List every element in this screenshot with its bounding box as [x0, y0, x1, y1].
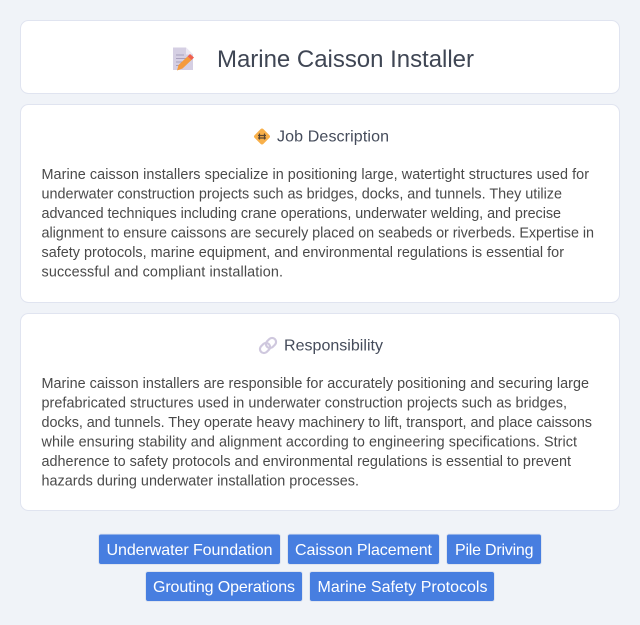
tag: Caisson Placement: Caisson Placement — [295, 542, 433, 559]
panel: job description — [20, 104, 620, 302]
icon: construction sign — [253, 128, 271, 145]
text block: responsibility: prefabricated structures used in underwater construction projects such as bridges, — [42, 395, 567, 411]
heading: job description: Job Description — [277, 128, 389, 146]
text block: responsibility: hazards during underwater installation processes. — [42, 473, 359, 489]
text block: job description: underwater construction projects such as bridges, docks, and tunnels. They utilize — [42, 186, 562, 202]
icon: document with pencil — [173, 48, 194, 70]
panel: title — [20, 20, 620, 94]
panel: responsibility — [20, 314, 620, 510]
tag: Grouting Operations — [146, 572, 302, 602]
tag: Marine Safety Protocols — [310, 572, 494, 602]
text block: responsibility: adherence to safety protocols and environmental regulations is essential to prevent — [42, 454, 571, 470]
tag: Grouting Operations: Grouting Operations — [153, 579, 295, 596]
tag: Caisson Placement — [288, 534, 440, 564]
tag: Pile Driving — [446, 534, 542, 564]
text block: job description — [42, 167, 594, 280]
tag: Pile Driving: Pile Driving — [455, 542, 534, 559]
heading: title: Marine Caisson Installer — [217, 46, 474, 73]
text block: job description: safety protocols, marine equipment, and environmental regulations is essential for — [42, 245, 564, 261]
text block: responsibility: while ensuring stability and alignment according to engineering specifications. Strict — [40, 434, 577, 450]
tag row: skills — [98, 534, 542, 602]
text block: job description: Marine caisson installers specialize in positioning large, watertight structures used for — [42, 167, 589, 183]
icon: chain link — [258, 336, 278, 355]
text block: job description: alignment to ensure caissons are securely placed on seabeds or riverbeds. Expertise in — [42, 225, 594, 241]
heading: responsibility: Responsibility — [284, 338, 383, 354]
tag: Underwater Foundation: Underwater Foundation — [106, 542, 272, 559]
text block: responsibility: Marine caisson installers are responsible for accurately positioning and securing large — [42, 376, 589, 392]
text block: responsibility: docks, and tunnels. They operate heavy machinery to lift, transport, and place caissons — [42, 415, 592, 431]
text block: job description: advanced techniques including crane operations, underwater welding, and precise — [42, 206, 561, 222]
tag: Marine Safety Protocols: Marine Safety Protocols — [318, 579, 488, 596]
text block: responsibility — [40, 376, 592, 489]
text block: job description: successful and compliant installation. — [42, 264, 283, 280]
tag: Underwater Foundation — [98, 534, 280, 564]
